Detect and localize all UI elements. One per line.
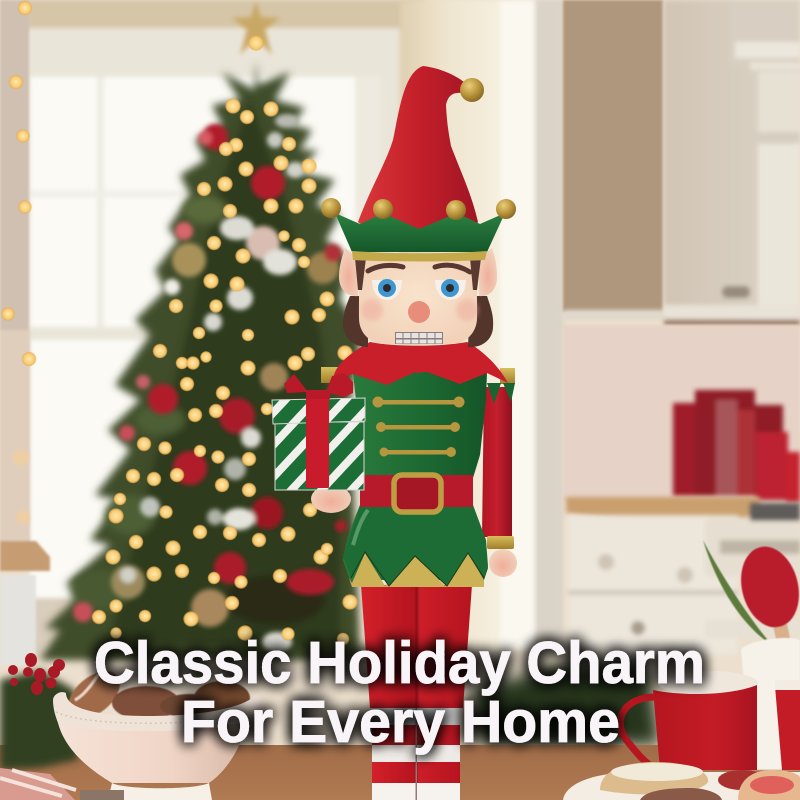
christmas tree: [1, 0, 362, 660]
upper cabinet: [563, 0, 800, 325]
belt and buckle: [360, 475, 473, 512]
epaulets: [321, 367, 515, 404]
right eye: [435, 279, 466, 300]
skirt: [343, 505, 488, 587]
gift bow: [284, 373, 353, 399]
ornaments: [73, 114, 347, 652]
nutcracker elf figure: [272, 66, 517, 800]
striped napkin and cutters: [0, 768, 124, 800]
pale wall glows: [13, 450, 30, 524]
left eye: [372, 279, 402, 300]
teeth: [395, 332, 443, 344]
crown collar: [321, 198, 516, 262]
red mug: [620, 671, 800, 770]
star topper: [231, 1, 281, 55]
hat: [358, 66, 484, 232]
ears: [339, 248, 497, 296]
title: Classic Holiday Charm: [94, 630, 705, 696]
left hand: [311, 485, 351, 513]
bokeh lights: [1, 0, 358, 646]
legs: [361, 585, 472, 800]
lower wall: [563, 325, 800, 501]
tree body: [40, 60, 362, 660]
collar: [334, 342, 508, 385]
wooden table: [0, 745, 800, 800]
drawers: [568, 503, 800, 655]
pine sprig with red berries: [0, 653, 78, 770]
window frame and panes: [25, 0, 425, 658]
cookie bowl: [53, 662, 260, 800]
torso: [353, 372, 487, 478]
spoon and leaf in cup: [703, 540, 800, 770]
greenery behind table: [470, 665, 660, 745]
cream wall and white column: [400, 0, 563, 650]
face: [355, 258, 481, 344]
left pillar: [0, 0, 50, 665]
cookie plate: [563, 762, 800, 800]
gold jacket bars: [372, 396, 464, 457]
gift box: [272, 373, 365, 490]
hair: [343, 296, 493, 347]
upper wall: [563, 0, 663, 312]
nose: [408, 301, 430, 323]
eyebrows: [368, 265, 470, 272]
books on counter: [673, 390, 800, 502]
right arm: [482, 387, 517, 577]
title: For Every Home: [181, 689, 620, 755]
cookies: [59, 662, 250, 728]
counter top: [566, 497, 760, 532]
